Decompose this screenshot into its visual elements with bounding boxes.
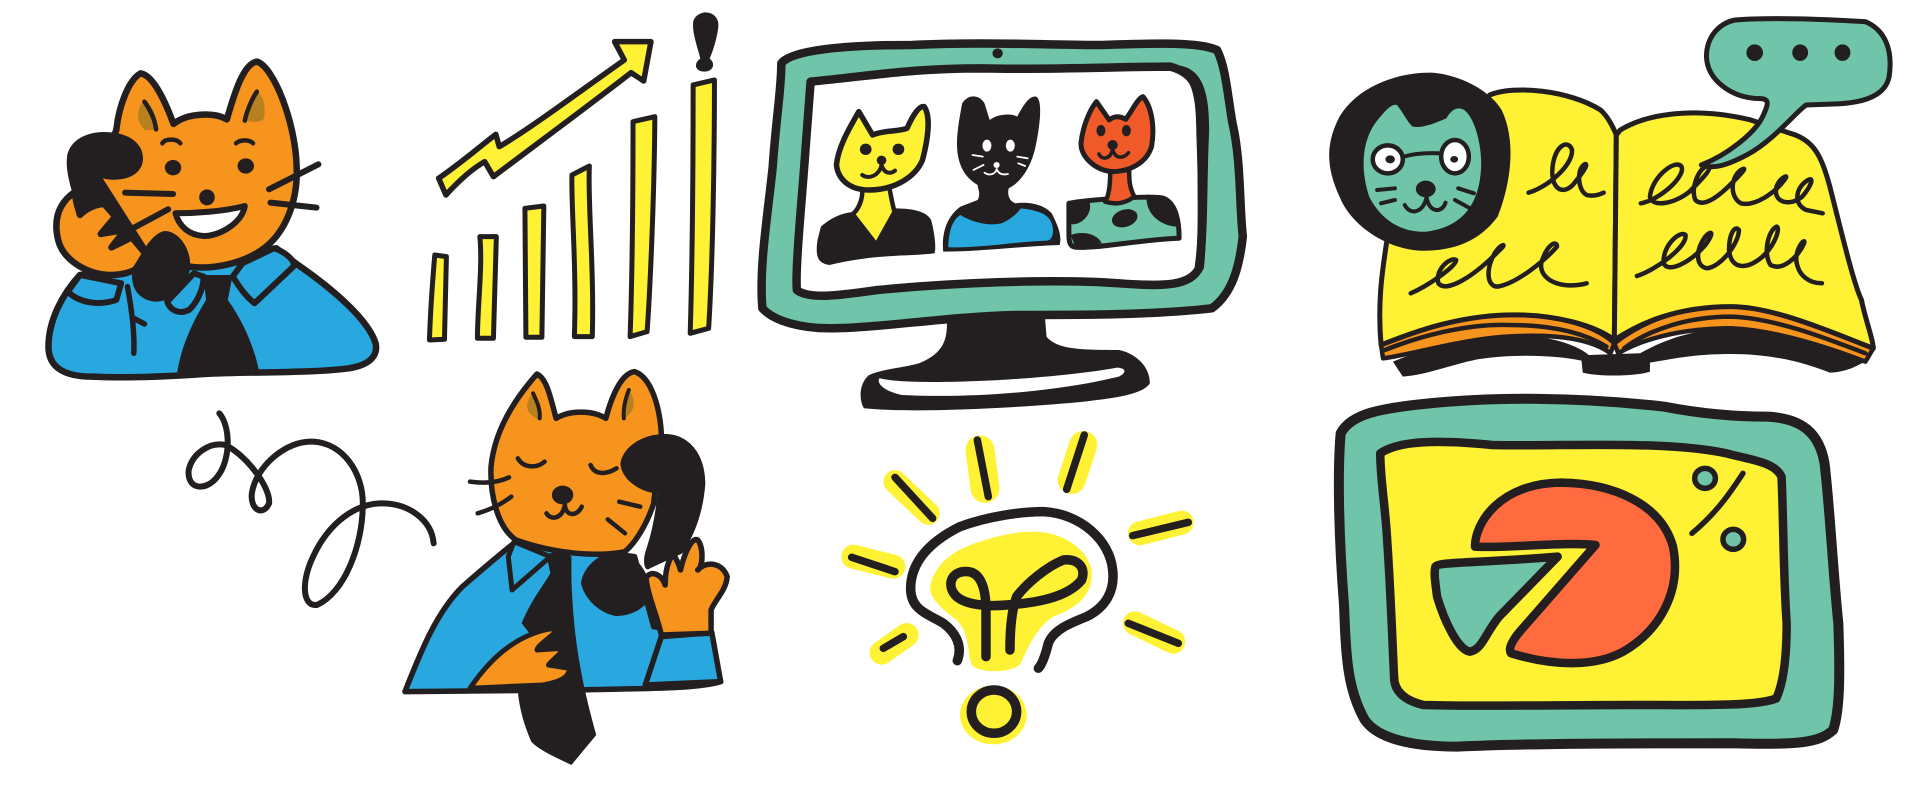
book cover [1393, 328, 1865, 377]
jacket collar [508, 542, 550, 590]
cat jacket [48, 248, 376, 377]
glow rays yellow [853, 445, 1182, 653]
screen border thick edge [1172, 65, 1209, 270]
icon: light bulb [852, 435, 1188, 744]
bulb glow fill [930, 532, 1092, 671]
illustration: calm cat on phone [405, 372, 727, 765]
telephone handset [581, 434, 705, 616]
cat hand with fingers [56, 192, 148, 275]
shirt crease [127, 287, 144, 353]
bulb filament [951, 560, 1083, 657]
percent symbol [1692, 468, 1744, 549]
telephone mouthpiece [132, 231, 190, 302]
cuff [645, 633, 721, 685]
exclamation mark [693, 12, 718, 72]
cat face [470, 458, 640, 533]
cat with glasses portrait [1329, 73, 1511, 251]
bar chart with rising arrow [429, 12, 718, 340]
monitor screen [797, 67, 1202, 296]
cat head [491, 372, 661, 554]
red cat [1069, 97, 1179, 248]
chart bars [429, 80, 714, 340]
necktie [518, 553, 596, 765]
necktie [177, 275, 259, 374]
tablet frame [1339, 399, 1839, 747]
handwriting squiggles [1411, 145, 1823, 293]
tablet screen [1380, 442, 1787, 706]
illustration: open book with cat and speech bubble [1329, 19, 1890, 377]
monitor frame [762, 44, 1243, 328]
cat face [125, 140, 318, 236]
pie slice [1435, 557, 1558, 652]
cat jacket [405, 542, 721, 692]
right page [1614, 113, 1873, 348]
monitor stand [861, 315, 1150, 410]
black cat [943, 96, 1060, 252]
webcam [992, 48, 1003, 58]
jacket collars [68, 248, 294, 312]
book page edges [1381, 307, 1873, 362]
decorative squiggle line [189, 413, 434, 605]
yellow cat [817, 106, 935, 265]
illustration: pie chart tablet [1339, 399, 1839, 747]
telephone handset [67, 132, 153, 267]
rising arrow [439, 42, 651, 195]
illustration: video call monitor [762, 44, 1243, 410]
inner ears [138, 92, 265, 130]
bulb outline [911, 512, 1113, 668]
hand on chest [470, 628, 569, 688]
bulb base ring [960, 686, 1027, 744]
glow rays black [852, 435, 1188, 648]
hand holding phone [646, 540, 727, 635]
inner ears [527, 390, 634, 418]
pie chart main [1475, 483, 1675, 663]
illustration: smiling cat on phone [48, 62, 376, 377]
left page [1380, 90, 1616, 345]
cat head [97, 62, 297, 267]
speech bubble [1701, 19, 1890, 167]
